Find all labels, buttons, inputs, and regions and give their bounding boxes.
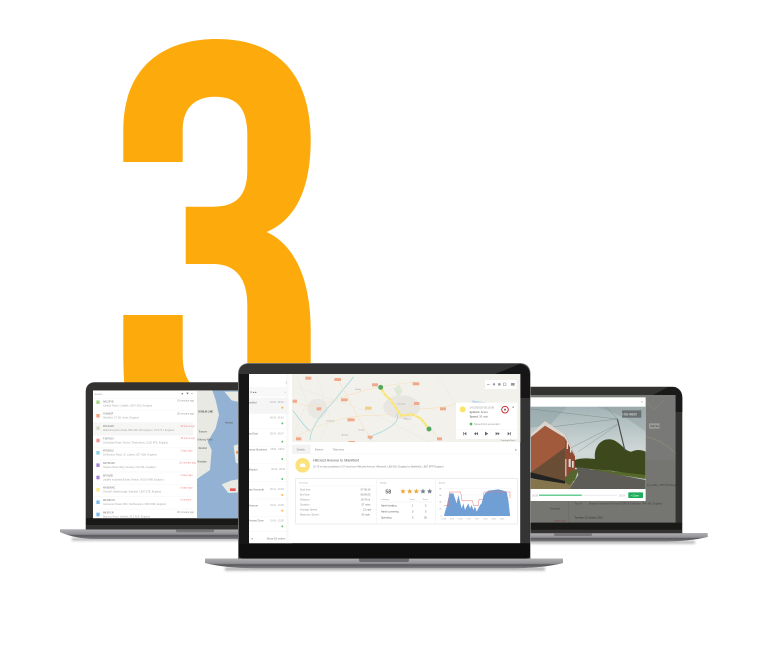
journey summary table: Distance (300, 499, 310, 502)
speed chart: 08:14 (500, 519, 504, 521)
speed chart: 40 (439, 502, 441, 504)
ground in front of house (530, 478, 574, 489)
dimmed map and table behind modal: Dunshaw (550, 507, 561, 510)
main laptop lower bezel (239, 543, 530, 558)
fleet list rows (93, 398, 197, 518)
trip list panel: › (285, 390, 286, 394)
speed area (444, 489, 510, 516)
trip list panel (249, 374, 292, 543)
fleet list rows: Sheffield, S7 2B, Yorks, England (103, 417, 139, 420)
fleet list rows: Cheshill, Marlborough, Swindon, LE57 5TE, England (103, 491, 162, 494)
trip list panel: Bradon (249, 467, 258, 471)
harsh events table: 5 (425, 511, 427, 514)
big orange numeral 3 (123, 39, 311, 410)
tab bar: × (515, 448, 517, 452)
camera timestamp overlay (622, 410, 641, 418)
harsh events table: Harsh braking (381, 505, 397, 508)
main laptop hinge notch (359, 558, 409, 562)
right laptop screen (525, 395, 676, 523)
journey summary table: End time (300, 494, 310, 497)
speed limit sign (502, 406, 508, 413)
fleet list rows: 28 minutes ago (177, 412, 195, 415)
rivers (293, 377, 398, 440)
right laptop base (525, 533, 708, 542)
vehicle popup: Speed: 30 mph (470, 414, 489, 418)
trip stats card (296, 479, 517, 524)
fleet map: Rosslare (198, 460, 208, 463)
harsh events table: 3 (412, 517, 414, 520)
fleet list rows: 18 hours ago (180, 437, 195, 440)
speed chart: 07:47 (475, 519, 479, 521)
trip list panel: 09:04 - 09:57 (270, 433, 284, 435)
main laptop corner reflection (495, 364, 530, 398)
fleet list rows: 5 minutes (180, 499, 192, 502)
main laptop left inner bezel (239, 374, 249, 544)
place names: Desford (327, 419, 335, 422)
trip list panel: ⋮ (284, 380, 288, 384)
fleet map: Wexford (198, 447, 208, 450)
road (569, 468, 646, 489)
utility pole and wires (617, 419, 625, 451)
right laptop corner reflection (653, 387, 682, 412)
fleet list rows: FJ67NGX (103, 437, 114, 440)
place names: Wigston (403, 417, 412, 420)
journey summary table: 60 mph (362, 514, 371, 517)
left laptop shadow (72, 538, 242, 540)
speed chart: 0 (440, 515, 441, 517)
journey summary table: Overview (299, 482, 308, 485)
tab bar (292, 445, 519, 454)
fleet list rows: 23 minutes ago (179, 462, 197, 465)
trip description: 19.79 mi trip completed in 57 mins from Hillcrest Avenue, Hibworth, LE8 0NJ, England to Markfield, LE67 9PP England (313, 465, 444, 468)
dimmed map and table behind modal: ley, Ashby, XF57 5LH Eng (647, 484, 676, 487)
fleet list rows: 2 days ago (180, 449, 193, 452)
fleet list rows: Chichester Road, Norton, Tewkesbury, GL20 6PX, England (103, 441, 169, 444)
main laptop screen: Copyright Here (501, 439, 516, 442)
dimmed map and table behind modal: Tue 14 (574, 502, 583, 505)
fleet list rows: 19 minutes ago (177, 400, 195, 403)
fleet list rows: MK69YJK (103, 511, 114, 514)
speed chart: 08:05 (492, 519, 496, 521)
fleet list rows: KR70FUM (103, 462, 115, 465)
trip details pane (292, 442, 518, 524)
driver score: 58 (385, 489, 391, 495)
fleet list rows: KP18HJZ (103, 450, 114, 453)
fleet map: DUBLIN LINE (198, 411, 214, 413)
dimmed map and table behind modal (550, 400, 676, 522)
speed chart: 07:28 (458, 519, 463, 521)
trip list panel: shfield (249, 400, 257, 404)
video modal: × (641, 400, 643, 404)
main laptop shadow (225, 568, 545, 570)
fleet list rows: Grosvenor Road, NN3, Northampton, NN3 6NN, England (103, 503, 166, 506)
fleet list rows: MX68XWC (103, 487, 115, 490)
fleet list rows: M70SAB (103, 474, 113, 477)
fleet list rows: Hughes Motor Way, Kensley, Colt 3DL, England (103, 466, 156, 469)
journey summary table: Average Speed (300, 509, 318, 512)
fleet list rows: 5 days ago (180, 486, 193, 489)
harsh events table: Category (381, 498, 389, 501)
journey summary table: 21 mph (363, 509, 372, 512)
harsh events table (380, 498, 432, 520)
right laptop shadow (530, 541, 695, 544)
left laptop base (60, 529, 245, 539)
journey summary table: 08:06:09 (361, 494, 371, 497)
vehicle popup: × (512, 405, 515, 410)
tab bar: Telemetry (333, 448, 345, 452)
fleet list rows: 18 Bourton Road, St. Loasby, LE7 4QS, England (103, 454, 157, 457)
main laptop base (205, 558, 563, 568)
playback controls (463, 432, 511, 436)
harsh events table: Count (409, 498, 415, 501)
harsh events table: 5 (425, 505, 427, 508)
speed chart: 07:56 (483, 519, 488, 521)
left laptop screen (93, 390, 243, 518)
fleet map: Tramore (198, 430, 208, 433)
trip list panel: 08:30 - 09:24 (270, 418, 284, 420)
journey summary table: 19.79 mi (361, 499, 371, 502)
dashcam photo: HGHHEIII (622, 413, 637, 417)
right laptop lid (525, 387, 682, 533)
right laptop hinge notch (554, 533, 592, 536)
route map (290, 374, 521, 443)
harsh events table: 1 (412, 505, 414, 508)
harsh events table: Score (423, 498, 429, 501)
place names: Groby (358, 428, 365, 431)
trip title: Hillcrest Avenue to Markfield (313, 458, 359, 462)
left laptop hinge notch (176, 529, 214, 532)
left laptop (60, 382, 245, 540)
speed chart: 60 (439, 495, 441, 497)
dimmed map and table behind modal: Brackets Vanstone Persian KG99CAJ Swindon, IP-4 3KC England (589, 502, 663, 505)
harsh events table: Speeding (381, 517, 392, 520)
fleet list rows: AK11FYE (103, 400, 114, 403)
trip icon (295, 458, 310, 473)
trip list panel: Avenue (249, 503, 258, 507)
fleet map (197, 390, 240, 518)
speed chart: 80 (439, 488, 441, 490)
journey summary table: Duration (300, 504, 310, 507)
video modal: ▪ Close (631, 494, 640, 497)
trip list panel: 09:13 - 09:34 (271, 469, 286, 471)
main laptop (205, 363, 563, 570)
dimmed map and table behind modal: Tuesday 12 October 2021 (574, 517, 604, 520)
main laptop lid (238, 363, 530, 559)
fleet list rows: AY66BJF (103, 412, 114, 415)
right laptop lower bezel (525, 523, 682, 530)
fleet list rows: 28 minutes ago (177, 511, 195, 514)
harsh events table: 0 (412, 511, 414, 514)
hedge and trees (575, 439, 646, 477)
right laptop (525, 387, 708, 544)
road labels (293, 377, 446, 443)
trip list panel: 11 ■ ■ (250, 391, 257, 394)
roads (290, 379, 457, 440)
fleet list rows: 2 days ago (180, 474, 193, 477)
main laptop screen (249, 374, 521, 543)
harsh events table: 30 (424, 517, 427, 520)
trip list panel: ate Keynorth (249, 488, 265, 492)
fleet list rows: Marconi Road, Hatfield, DL1 4LR, England (103, 515, 151, 518)
journey summary table: Maximum Speed (300, 514, 319, 517)
driver score (380, 482, 432, 520)
trip list panel: Arnate Drive (249, 519, 264, 523)
dimmed map and table behind modal: M40 Sec (650, 426, 660, 428)
speed chart: Speed (439, 483, 446, 485)
trip list panel: 08:31 - 09:04 (271, 449, 285, 451)
trip list panel: 13:31 - 08:32 (270, 402, 284, 404)
fleet list rows: Carlisle Road, Coalville, LE67 3QU, England (103, 404, 153, 407)
left laptop lower bezel (86, 518, 245, 525)
speed chart: 07:37 (467, 519, 471, 521)
dimmed map and table behind modal: 3 days ago (553, 520, 566, 523)
trip list panel: xx (251, 538, 254, 540)
trip list panel: Show 18 orders (267, 536, 286, 540)
tab bar: Details (297, 448, 305, 452)
house (531, 421, 575, 482)
harsh events table: Harsh cornering (381, 511, 399, 514)
journey summary table (299, 482, 373, 517)
trip list panel: rance Business (249, 448, 268, 452)
map toolbar (485, 380, 517, 389)
fleet list rows: FD14GZC (103, 425, 115, 428)
trip list panel: ay East (249, 432, 258, 436)
vehicle popup: 24/10/2018 08:10:08 (470, 406, 495, 410)
fleet list rows: 19 hours ago (180, 425, 195, 428)
fleet map: Kilkenny Ross (198, 439, 213, 441)
trip list panel: 09:41 - 10:03 (270, 489, 284, 491)
speed chart (439, 483, 511, 521)
vehicle popup: Ignition: Active (470, 410, 488, 414)
place names: Leicester (397, 402, 406, 405)
video progress bar: 00:08 (532, 495, 539, 497)
left laptop lid (86, 382, 245, 530)
fleet list rows: Wolverhampton Road, B69 4RJ, Birmingham, CV3 2TJ, England (103, 429, 175, 432)
tab bar: Events (315, 448, 324, 452)
vehicle popup (456, 403, 517, 439)
place names: Kirkby (355, 388, 362, 391)
fleet map: Aberyst (225, 422, 233, 425)
top bar of fleet list (94, 392, 192, 395)
rating stars (400, 489, 432, 494)
trip list panel: 10:01 - 10:28 (270, 505, 284, 507)
speed chart: 20 (439, 508, 441, 510)
place names: Anstey (342, 433, 349, 436)
fleet list rows: MK16PVN (103, 499, 115, 502)
speed chart: 07:18 (450, 519, 454, 521)
top bar of fleet list: Assets (94, 392, 103, 396)
fleet list rows: Jacklife Industrial Estate, Nelson, NG19 0NW, England (103, 478, 164, 481)
speed chart: 07:09 (442, 519, 446, 521)
driver score: Rating (380, 482, 387, 485)
route start marker (378, 385, 383, 390)
route line (381, 387, 429, 429)
video modal: 00:14 (619, 495, 626, 497)
place names (327, 388, 412, 436)
journey summary table: 57 mins (362, 504, 371, 507)
route end marker (426, 426, 431, 431)
close button (628, 492, 643, 498)
journey summary table: 07:09:14 (361, 489, 371, 492)
vehicle popup: Speed limit exceeded (474, 422, 500, 426)
speed limit line (444, 492, 510, 506)
video modal (525, 397, 646, 501)
journey summary table: Start time (300, 489, 311, 492)
trip list panel: 10:41 - 10:58 (270, 520, 284, 522)
